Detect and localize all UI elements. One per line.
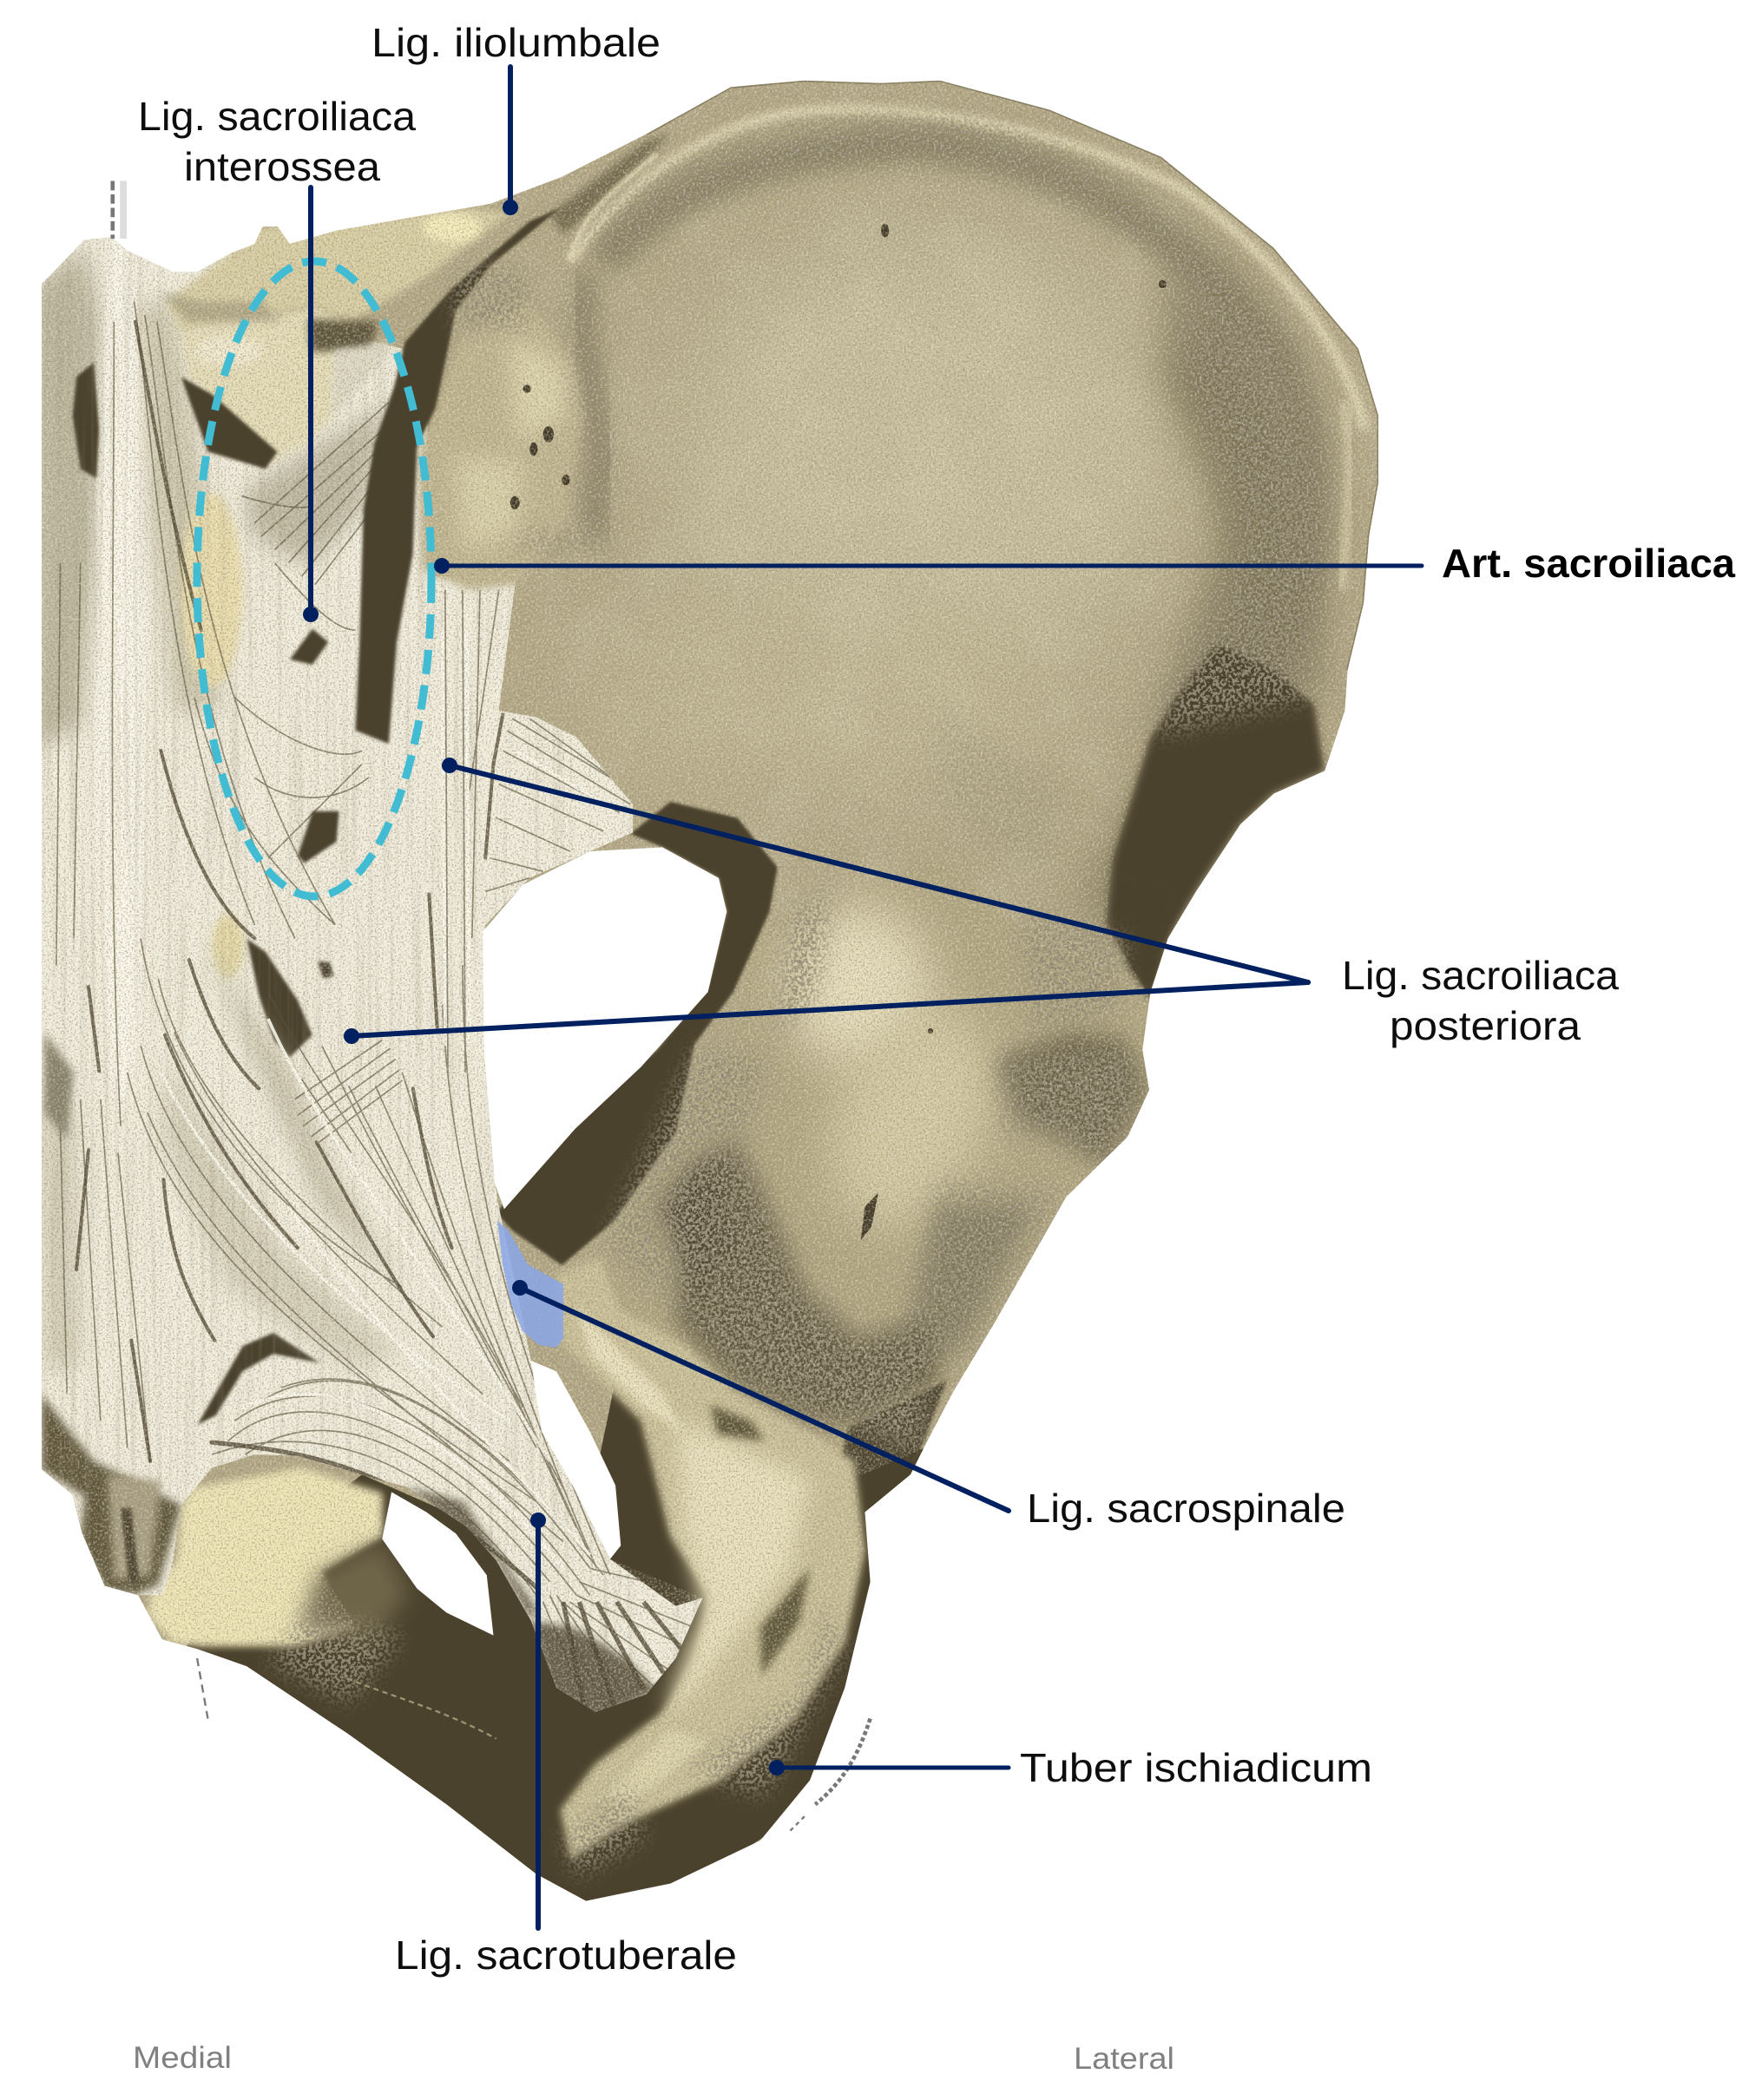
label: Lig. sacroiliaca posteriora — [1342, 953, 1619, 1048]
pubic ramus highlight — [148, 1468, 382, 1646]
label: Lig. iliolumbale: Lig. iliolumbale — [371, 20, 661, 65]
dark shadow on the lateral ilium — [1106, 644, 1325, 999]
anatomical illustration: posterior pelvis with ligaments — [42, 80, 1378, 1900]
engraved dotted line on dark bone — [347, 1678, 496, 1739]
sciatic foramina and openings — [382, 847, 726, 1636]
white fibre highlights — [121, 456, 603, 1568]
label: Lig. sacroiliaca interossea: Lig. sacroiliaca — [138, 94, 416, 139]
lower pelvis dark region — [186, 1388, 924, 1900]
label: Lig. sacroiliaca interossea: interossea — [184, 144, 380, 189]
bone silhouette and shading — [42, 80, 1378, 1900]
heavy dark fibre strokes — [76, 322, 537, 1589]
leader: Lig. sacroiliaca interossea — [303, 187, 319, 622]
label: Lig. sacrospinale: Lig. sacrospinale — [1027, 1486, 1345, 1531]
dark arc around greater sciatic notch — [496, 802, 778, 1265]
stray engraving marks — [113, 181, 871, 1831]
hand-drawn ligament fibres — [56, 302, 704, 1742]
silhouette edge — [647, 81, 1378, 670]
label: Medial: Medial — [133, 2041, 232, 2075]
label: Lig. sacroiliaca posteriora: Lig. sacroiliaca — [1342, 953, 1619, 998]
label: Lig. sacroiliaca interossea — [138, 94, 416, 189]
leader: Art. sacroiliaca — [434, 558, 1422, 574]
faded lower end of sacrotuberous ligament — [406, 1486, 681, 1718]
ligament mass — [42, 238, 703, 1712]
central dark cleft and crest diagonal — [355, 207, 561, 744]
leader: Tuber ischiadicum — [769, 1760, 1009, 1775]
label: Art. sacroiliaca: Art. sacroiliaca — [1442, 541, 1735, 586]
bone pores — [510, 224, 1167, 1240]
grey fan behind upper ligament — [247, 402, 389, 567]
vertical fibre texture — [0, 201, 751, 1809]
dashed ellipse: interosseous ligament region — [197, 261, 431, 896]
yellow patches — [181, 493, 244, 979]
leader: Lig. iliolumbale — [503, 67, 518, 215]
leader: Lig. sacrospinale — [512, 1280, 1009, 1511]
label: Tuber ischiadicum: Tuber ischiadicum — [1020, 1745, 1372, 1790]
body of ischium shading — [643, 885, 1172, 1512]
leader: Lig. sacrotuberale — [530, 1513, 546, 1928]
ischial spine and tuberosity highlight — [556, 1257, 865, 1860]
highlight: sacrospinous ligament — [497, 1221, 563, 1348]
posterior sacral foramina — [290, 629, 339, 979]
sacrum upper bone — [161, 207, 511, 469]
dark oval on left sacrum — [72, 362, 99, 478]
leader: Lig. sacroiliaca posteriora — [344, 758, 1308, 1044]
label: Lig. sacroiliaca posteriora: posteriora — [1390, 1003, 1581, 1048]
ilium crest shadow and PSIS bulge — [355, 134, 1167, 1240]
label: Lig. sacrotuberale: Lig. sacrotuberale — [395, 1933, 737, 1978]
label: Lateral: Lateral — [1074, 2042, 1174, 2076]
